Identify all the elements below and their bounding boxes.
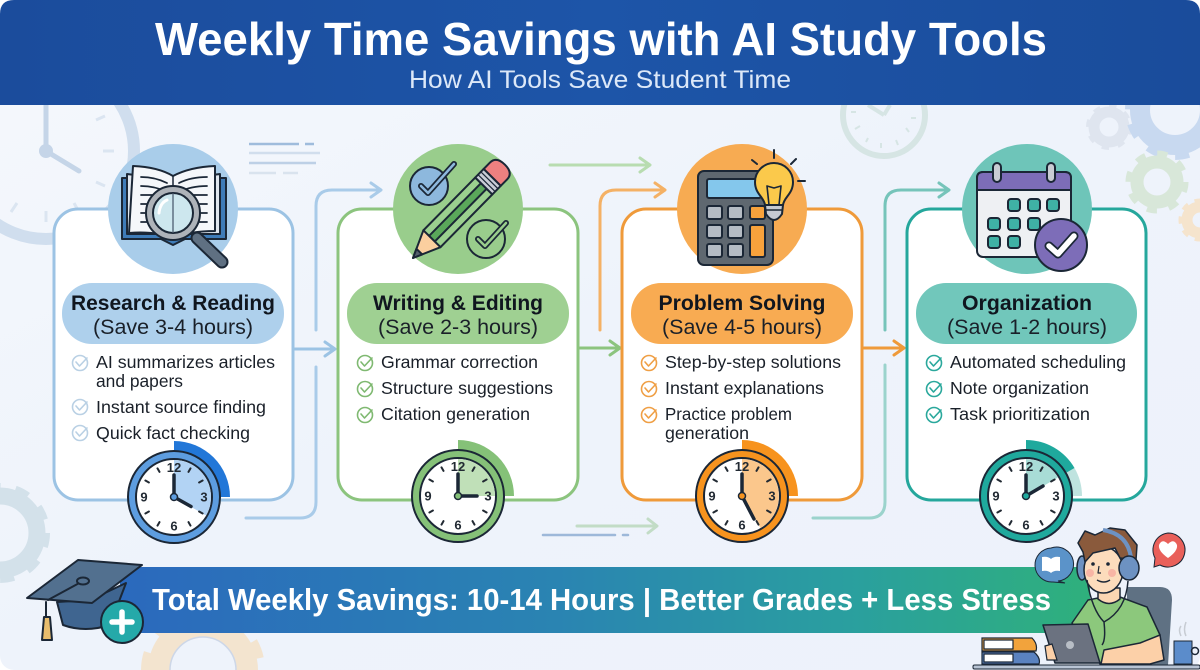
heading pill — [631, 283, 853, 344]
icon: pencil with check marks — [404, 156, 513, 266]
clock: 4-5 hours: 9 — [708, 488, 716, 504]
checklist: Citation generation — [381, 404, 530, 424]
arrow: lower green — [577, 519, 657, 533]
neck and head — [1077, 528, 1137, 604]
clock: 3-4 hours: 6 — [170, 518, 178, 534]
illustration: student at laptop — [973, 528, 1200, 669]
coffee mug — [1174, 622, 1198, 664]
savings: (Save 2-3 hours) — [378, 316, 538, 339]
arrow: problem solving to organization, upper — [885, 183, 949, 330]
speech bubble: book — [1035, 547, 1074, 583]
checklist: Automated scheduling — [950, 352, 1126, 372]
checklist: AI summarizes articles — [96, 352, 275, 372]
icon circle — [962, 144, 1092, 274]
clock: 4-5 hours — [696, 440, 798, 542]
headphones — [1087, 530, 1139, 645]
title: Weekly Time Savings with AI Study Tools — [155, 13, 1047, 65]
panel: research and reading — [54, 144, 293, 543]
background decoration: large clock — [0, 63, 134, 239]
clock: 3-4 hours: 12 — [167, 460, 181, 475]
header band — [0, 0, 1200, 105]
subtitle: How AI Tools Save Student Time — [409, 66, 791, 94]
panel: writing and editing — [338, 144, 578, 542]
card frame — [907, 209, 1146, 500]
clock: 3-4 hours: 9 — [140, 490, 148, 504]
stack of books — [982, 638, 1039, 664]
clock: 4-5 hours: 6 — [738, 518, 746, 532]
icon: open book with magnifier — [122, 166, 226, 262]
card frame — [338, 209, 578, 500]
clock: 1-2 hours: 6 — [1022, 518, 1030, 532]
arrow: writing to problem solving, orange — [600, 183, 665, 330]
checklist — [926, 352, 1126, 424]
clock: 1-2 hours: 9 — [992, 488, 1000, 504]
arrow: research to writing, upper — [316, 183, 381, 330]
heading: Writing & Editing — [373, 292, 543, 315]
checklist: Instant explanations — [665, 378, 824, 398]
laptop — [1043, 624, 1100, 663]
icon: calculator with light bulb — [698, 150, 805, 265]
checklist: Quick fact checking — [96, 423, 250, 443]
checklist — [642, 352, 841, 443]
checklist: Structure suggestions — [381, 378, 553, 398]
arrow: problem solving return line — [813, 365, 885, 518]
checklist: Grammar correction — [381, 352, 538, 372]
clock: 3-4 hours — [128, 441, 230, 543]
background decoration: top clock — [843, 74, 925, 156]
clock: 1-2 hours: 3 — [1052, 488, 1060, 504]
background decoration: faint text lines — [249, 144, 320, 173]
checklist: generation — [665, 423, 749, 443]
heading: Research & Reading — [71, 292, 275, 315]
card frame — [54, 209, 293, 500]
panel: problem solving — [622, 144, 862, 542]
clock: 2-3 hours: 3 — [484, 488, 492, 504]
checklist — [72, 352, 275, 443]
savings: (Save 4-5 hours) — [662, 316, 822, 339]
icon circle — [393, 144, 523, 274]
hand — [1045, 644, 1057, 660]
shirt — [1072, 597, 1160, 664]
summary banner — [120, 567, 1090, 633]
checklist: Note organization — [950, 378, 1089, 398]
arrow: writing to problem solving, middle — [580, 341, 620, 355]
arrow: problem solving to organization, middle — [864, 341, 904, 355]
icon: calendar with check badge — [977, 163, 1087, 271]
arrow: writing to problem solving, upper green — [550, 158, 650, 172]
checklist — [358, 352, 553, 424]
checklist: Practice problem — [665, 404, 792, 424]
clock: 1-2 hours — [980, 440, 1082, 542]
chair — [1127, 587, 1172, 665]
panel: organization — [907, 144, 1146, 542]
savings: (Save 1-2 hours) — [947, 316, 1107, 339]
clock: 4-5 hours: 3 — [768, 488, 776, 504]
clock: 2-3 hours: 12 — [451, 459, 465, 474]
heading pill — [62, 283, 284, 344]
arrows between cards — [246, 158, 949, 535]
icon: graduation cap with plus badge — [27, 560, 143, 643]
card frame — [622, 209, 862, 500]
savings: (Save 3-4 hours) — [93, 316, 253, 339]
clock: 3-4 hours: 3 — [200, 490, 208, 504]
checklist: and papers — [96, 371, 183, 391]
forearm — [1101, 635, 1164, 664]
clock: 4-5 hours: 12 — [735, 459, 749, 474]
desk — [973, 665, 1200, 669]
clock: 2-3 hours: 6 — [454, 518, 462, 532]
heading pill — [916, 283, 1137, 344]
checklist: Instant source finding — [96, 397, 266, 417]
clock: 1-2 hours: 12 — [1019, 459, 1033, 474]
clock: 2-3 hours: 9 — [424, 488, 432, 504]
heading: Problem Solving — [658, 292, 826, 315]
clock: 2-3 hours — [412, 440, 514, 542]
speech bubble: heart — [1153, 533, 1185, 567]
arrow: research return line — [246, 367, 316, 518]
heading: Organization — [962, 292, 1092, 315]
summary text: Total Weekly Savings: 10-14 Hours | Better Grades + Less Stress — [152, 582, 1051, 617]
arrow: research to writing, middle — [295, 342, 335, 356]
heading pill — [347, 283, 569, 344]
icon circle — [108, 144, 238, 274]
checklist: Step-by-step solutions — [665, 352, 841, 372]
decorative dash — [543, 534, 628, 536]
icon circle — [677, 144, 807, 274]
checklist: Task prioritization — [950, 404, 1090, 424]
